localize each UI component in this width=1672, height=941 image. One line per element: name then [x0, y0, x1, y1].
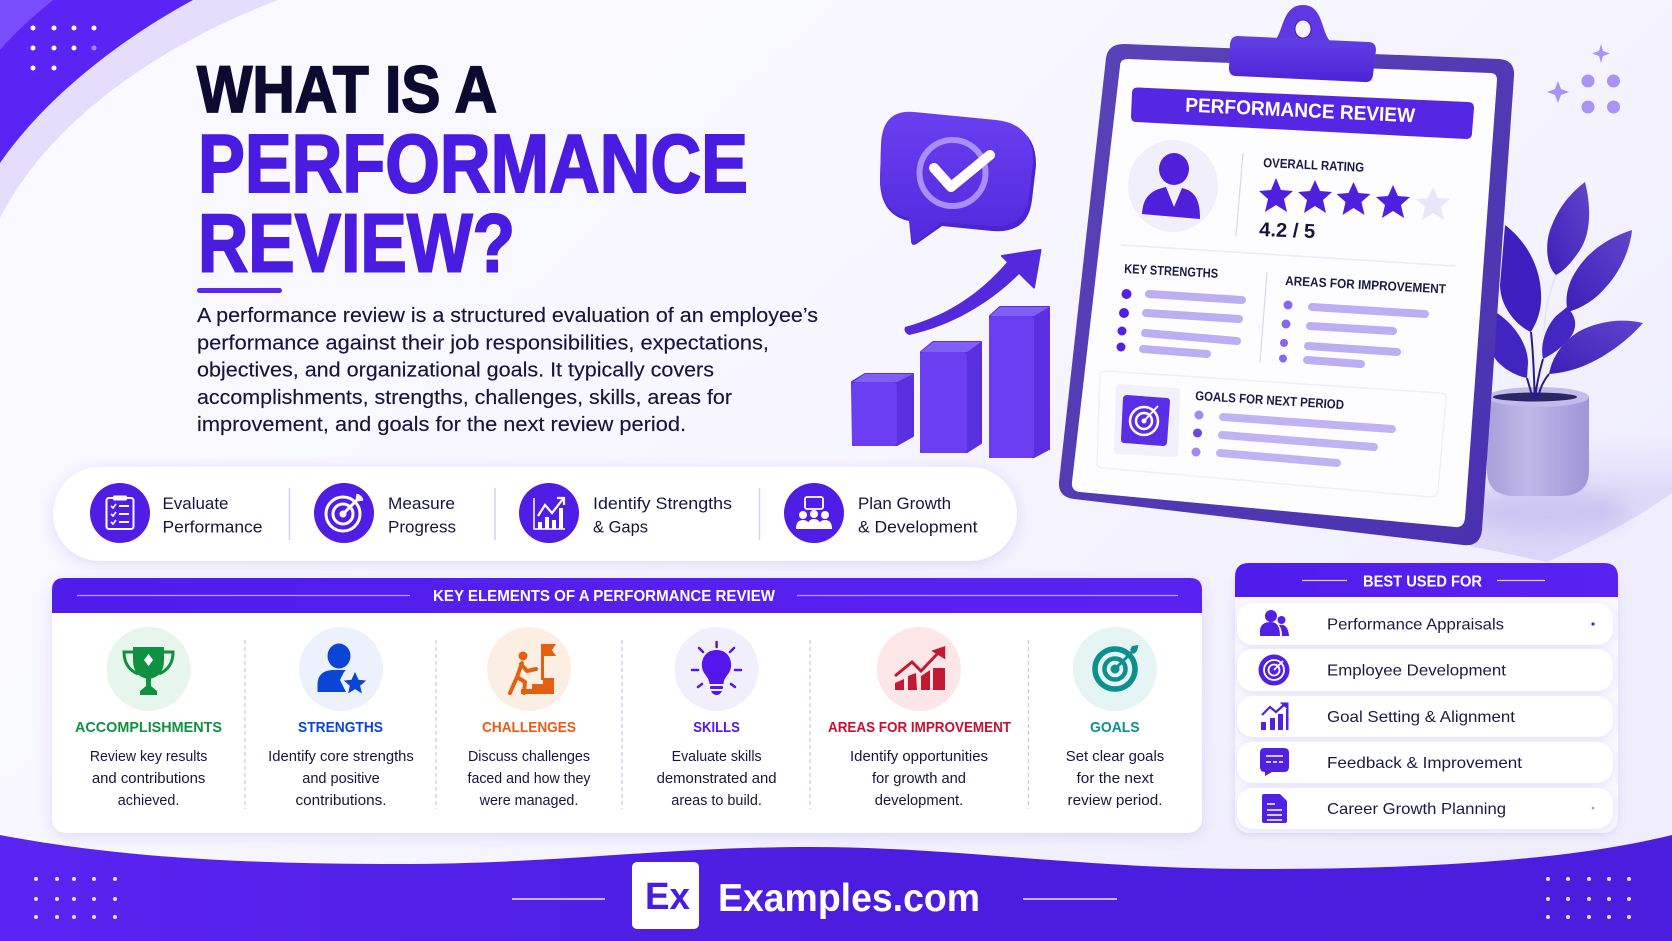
- element: areas for improvement: for growth and: [872, 771, 966, 787]
- goals icon: [1114, 384, 1180, 457]
- intro paragraph: A performance review is a structured evaluation of an employee’s: [197, 305, 818, 327]
- avatar: [1128, 140, 1218, 232]
- element: accomplishments: achieved.: [118, 793, 179, 809]
- intro paragraph: improvement, and goals for the next review period.: [197, 414, 686, 436]
- title: WHAT IS A: [197, 52, 497, 126]
- clipboard clip: [1229, 5, 1376, 82]
- element: goals: review period.: [1068, 793, 1162, 809]
- overall rating label: OVERALL RATING: [1263, 155, 1364, 175]
- element: accomplishments: and contributions: [92, 771, 205, 787]
- item: evaluate performance: [90, 483, 262, 543]
- element: accomplishments: ACCOMPLISHMENTS: [75, 719, 222, 736]
- element: strengths: Identify core strengths: [268, 749, 414, 765]
- bar chart: 3D bars: [852, 307, 1049, 458]
- element: skills: SKILLS: [693, 719, 740, 736]
- intro paragraph: objectives, and organizational goals. It typically covers: [197, 360, 714, 382]
- top-left corner shapes: [0, 0, 278, 218]
- row: performance appraisals: [1237, 603, 1613, 645]
- item: plan growth and development: & Development: [858, 518, 978, 536]
- element: strengths: and positive: [302, 771, 380, 787]
- element: challenges: faced and how they: [468, 771, 591, 787]
- column divider: [1260, 272, 1267, 362]
- element: goals: for the next: [1076, 771, 1154, 787]
- row: feedback and improvement: [1237, 742, 1613, 783]
- title: REVIEW?: [198, 196, 515, 290]
- best used header: BEST USED FOR: [1363, 574, 1482, 590]
- row: career growth planning: Career Growth Planning: [1327, 801, 1506, 818]
- clipboard illustration: [1059, 5, 1514, 545]
- title: PERFORMANCE: [198, 117, 748, 210]
- goals card: [1097, 371, 1446, 497]
- section divider: [1121, 245, 1455, 266]
- key strengths list: KEY STRENGTHS: [1124, 261, 1219, 281]
- row: feedback and improvement: Feedback & Improvement: [1327, 755, 1523, 772]
- item: identify strengths and gaps: Identify Strengths: [593, 494, 732, 513]
- element: goals: GOALS: [1090, 719, 1140, 736]
- item: measure progress: Progress: [388, 518, 456, 536]
- intro paragraph: [197, 305, 818, 436]
- soft pot shadow: [1472, 490, 1628, 534]
- item: identify strengths and gaps: & Gaps: [593, 518, 648, 536]
- goals card: GOALS FOR NEXT PERIOD: [1195, 388, 1344, 412]
- element: areas for improvement: [828, 627, 1011, 809]
- floor shadow beneath clipboard: [1470, 430, 1672, 562]
- intro paragraph: performance against their job responsibilities, expectations,: [197, 332, 769, 354]
- element: skills: [657, 627, 777, 809]
- footer band: [0, 835, 1672, 941]
- element: challenges: [468, 627, 591, 809]
- element: challenges: were managed.: [479, 793, 578, 809]
- logo wordmark: Examples.com: [718, 877, 980, 920]
- areas for improvement list: [1279, 273, 1446, 364]
- purpose pill strip: [53, 467, 1017, 561]
- icon: speech bubble with check: [880, 112, 1036, 245]
- best used header: [1235, 563, 1618, 597]
- logo mark: [632, 862, 699, 929]
- panel: best used for: [1235, 563, 1618, 833]
- element: skills: demonstrated and: [657, 771, 777, 787]
- item: evaluate performance: Performance: [162, 518, 262, 536]
- key strengths list: [1116, 261, 1242, 354]
- row: performance appraisals: Performance Appraisals: [1327, 616, 1504, 634]
- title underline: [197, 288, 282, 293]
- rating score: 4.2 / 5: [1259, 219, 1316, 243]
- item: identify strengths and gaps: [519, 483, 732, 543]
- element: goals: [1066, 627, 1164, 809]
- element: accomplishments: Review key results: [90, 749, 207, 765]
- element: strengths: contributions.: [296, 793, 386, 809]
- item: measure progress: Measure: [388, 494, 455, 513]
- key elements header: KEY ELEMENTS OF A PERFORMANCE REVIEW: [433, 588, 776, 605]
- clipboard banner: [1131, 88, 1474, 139]
- clipboard paper: [1072, 59, 1497, 527]
- intro paragraph: accomplishments, strengths, challenges, skills, areas for: [197, 387, 732, 409]
- element: goals: Set clear goals: [1066, 749, 1164, 765]
- item: measure progress: [314, 483, 456, 543]
- clipboard banner: PERFORMANCE REVIEW: [1185, 95, 1416, 127]
- key elements header: [52, 578, 1202, 613]
- element: areas for improvement: development.: [875, 793, 963, 809]
- title: [197, 52, 748, 290]
- element: challenges: CHALLENGES: [482, 719, 576, 736]
- row: goal setting and alignment: [1237, 696, 1613, 737]
- rating divider: [1236, 153, 1243, 236]
- star rating: [1259, 178, 1450, 220]
- sparkle and dot decoration: [1547, 44, 1620, 114]
- element: strengths: [268, 627, 414, 809]
- element: areas for improvement: Identify opportunities: [850, 749, 988, 765]
- element: areas for improvement: AREAS FOR IMPROVEMENT: [828, 719, 1011, 736]
- element: challenges: Discuss challenges: [468, 749, 590, 765]
- item: plan growth and development: Plan Growth: [858, 494, 951, 513]
- element: skills: Evaluate skills: [672, 749, 762, 765]
- item: evaluate performance: Evaluate: [162, 494, 228, 513]
- panel: key elements: [52, 578, 1202, 833]
- item: plan growth and development: [784, 483, 978, 543]
- element: skills: areas to build.: [671, 793, 762, 809]
- clipboard frame: [1059, 44, 1514, 545]
- icon: growth arrow: [904, 250, 1040, 335]
- element: accomplishments: [75, 627, 222, 809]
- plant with pot: [1487, 182, 1643, 496]
- logo mark: Ex: [645, 876, 690, 918]
- row: goal setting and alignment: Goal Setting & Alignment: [1327, 709, 1516, 726]
- row: employee development: Employee Development: [1327, 662, 1507, 680]
- element: strengths: STRENGTHS: [298, 719, 383, 736]
- row: employee development: [1237, 649, 1613, 691]
- areas for improvement list: AREAS FOR IMPROVEMENT: [1285, 273, 1446, 296]
- row: career growth planning: [1237, 788, 1613, 829]
